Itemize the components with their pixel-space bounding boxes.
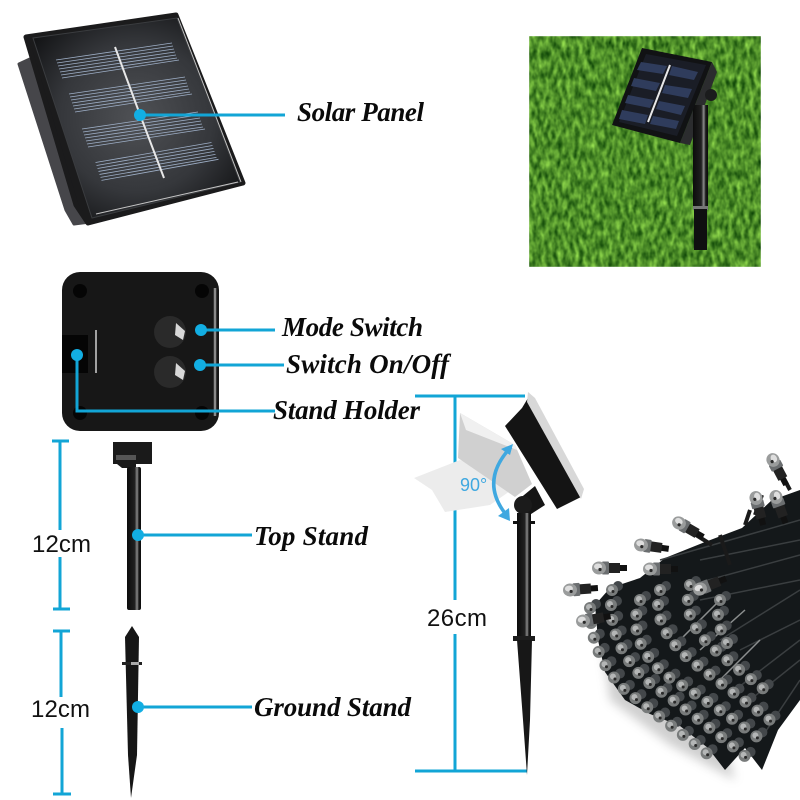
- tilt angle arrow 90°: [460, 444, 513, 521]
- ground stand: [122, 626, 142, 798]
- dimension: assembled height 26cm: 26cm: [427, 605, 487, 632]
- label: switch on/off: Switch On/Off: [286, 349, 452, 379]
- dimension: ground stand 12cm: 12cm: [31, 696, 90, 723]
- dimension: top stand 12cm: 12cm: [32, 531, 91, 558]
- tilt angle arrow 90°: 90°: [460, 475, 487, 495]
- assembled stand with tilting panel: [414, 392, 584, 775]
- connector: stand holder: [71, 349, 275, 411]
- solar panel product image: [19, 15, 243, 224]
- connector: switch on/off: [194, 359, 284, 371]
- label: mode switch: Mode Switch: [281, 312, 423, 342]
- connector: mode switch: [195, 324, 275, 336]
- photo: solar panel in grass: [529, 36, 761, 267]
- back of solar box: [62, 272, 219, 431]
- dimension: assembled height 26cm: [415, 396, 527, 771]
- label: top stand: Top Stand: [254, 521, 368, 551]
- connector: solar panel: [134, 109, 285, 121]
- connector: top stand: [132, 529, 252, 541]
- LED string light cluster: [563, 451, 800, 780]
- label: solar panel: Solar Panel: [297, 97, 424, 127]
- dimension: ground stand 12cm: [31, 631, 90, 794]
- label: stand holder: Stand Holder: [273, 395, 420, 425]
- top stand: [113, 442, 152, 610]
- dimension: top stand 12cm: [32, 441, 91, 609]
- connector: ground stand: [132, 701, 252, 713]
- label: ground stand: Ground Stand: [254, 692, 412, 722]
